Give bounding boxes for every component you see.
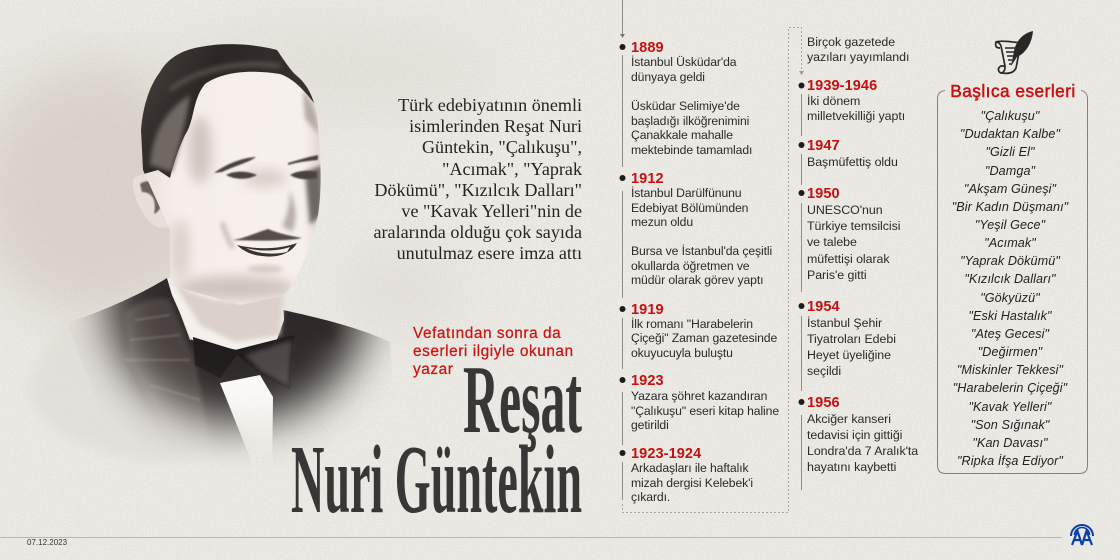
list of works: "Kavak Yelleri"	[968, 400, 1052, 414]
list of works: "Yeşil Gece"	[975, 218, 1045, 232]
icon: agency logo	[1070, 524, 1094, 546]
timeline column 2: yazıları yayımlandı	[807, 50, 909, 64]
timeline column 1: mektebinde tamamladı	[631, 142, 752, 156]
timeline column 1: mizah dergisi Kelebek'i	[631, 476, 753, 490]
timeline column 2: 1956	[807, 395, 840, 411]
list of works: "Kan Davası"	[972, 436, 1048, 450]
intro paragraph: isimlerinden Reşat Nuri	[409, 116, 582, 136]
list of works: "Bir Kadın Düşmanı"	[952, 200, 1068, 214]
date: 07.12.2023	[27, 538, 67, 547]
list of works: "Akşam Güneşi"	[964, 182, 1056, 196]
list of works: "Harabelerin Çiçeği"	[953, 381, 1067, 395]
timeline column 1: İlk romanı "Harabelerin	[631, 316, 753, 330]
intro paragraph: aralarında olduğu çok sayıda	[373, 222, 582, 242]
timeline column 1: başladığı ilköğrenimini	[631, 114, 749, 128]
timeline column 1: Üsküdar Selimiye'de	[631, 99, 740, 113]
list of works: "Ateş Gecesi"	[971, 327, 1049, 341]
timeline column 1: mezun oldu	[631, 215, 693, 229]
neck and shirt collar	[167, 278, 284, 350]
timeline column 2: ve talebe	[807, 235, 857, 249]
timeline column 1: Arkadaşları ile haftalık	[631, 461, 748, 475]
panel heading: Başlıca eserleri	[950, 81, 1076, 101]
list of works: "Değirmen"	[978, 345, 1042, 359]
timeline column 2: Londra'da 7 Aralık'ta	[807, 444, 918, 458]
timeline column 2: Başmüfettiş oldu	[807, 154, 898, 168]
portrait of Reşat Nuri Güntekin	[34, 44, 390, 458]
red subtitle: eserleri ilgiyle okunan	[413, 343, 574, 360]
main title	[291, 355, 582, 525]
panel: major works frame	[937, 90, 1088, 474]
timeline column 2: İki dönem	[807, 94, 860, 108]
intro paragraph: Türk edebiyatının önemli	[398, 95, 582, 115]
intro paragraph: ve "Kavak Yelleri"nin de	[401, 201, 582, 221]
timeline column 2: 1947	[807, 138, 840, 154]
list of works: "Acımak"	[984, 236, 1036, 250]
pale body silhouette	[30, 323, 255, 462]
timeline column 2: Heyet üyeliğine	[807, 348, 891, 362]
timeline column 1: Bursa ve İstanbul'da çeşitli	[631, 244, 772, 258]
timeline column 2: 1954	[807, 299, 840, 315]
hair	[140, 40, 325, 178]
timeline column 1: Yazara şöhret kazandıran	[631, 389, 767, 403]
timeline column 2: İstanbul Şehir	[807, 316, 882, 330]
timeline column 2: seçildi	[807, 364, 841, 378]
timeline column 1: müdür olarak görev yaptı	[631, 273, 763, 287]
timeline column 1: İstanbul Darülfünunu	[631, 186, 741, 200]
ear	[133, 175, 172, 228]
list of works: "Eski Hastalık"	[968, 309, 1052, 323]
list of works: "Dudaktan Kalbe"	[960, 127, 1060, 141]
list of works: "Kızılcık Dalları"	[964, 272, 1056, 286]
timeline column 1: İstanbul Üsküdar'da	[631, 55, 736, 69]
timeline column 1: "Çalıkuşu" eseri kitap haline	[631, 404, 779, 418]
red subtitle: Vefatından sonra da	[413, 325, 561, 342]
head and face	[140, 40, 325, 310]
timeline column 1: 1912	[631, 171, 664, 187]
list of works: "Çalıkuşu"	[981, 109, 1039, 123]
list of works: "Son Sığınak"	[971, 418, 1049, 432]
timeline column 2: UNESCO'nun	[807, 203, 883, 217]
list of works	[952, 109, 1068, 468]
intro paragraph: Dökümü", "Kızılcık Dalları"	[374, 180, 582, 200]
timeline column 2: 1939-1946	[807, 78, 877, 94]
red subtitle: yazar	[413, 361, 453, 378]
timeline lines and dotted connector	[620, 0, 804, 513]
timeline column 2: tedavisi için gittiği	[807, 428, 902, 442]
list of works: "Damga"	[985, 164, 1035, 178]
intro paragraph	[373, 95, 582, 263]
timeline column 1: 1923-1924	[631, 446, 701, 462]
list of works: "Gizli El"	[985, 145, 1035, 159]
timeline column 2: Paris'e gitti	[807, 268, 867, 282]
timeline column 1: okuyucuyla buluştu	[631, 346, 733, 360]
timeline column 1: 1923	[631, 373, 664, 389]
timeline column 1: getirildi	[631, 418, 669, 432]
timeline column 2	[807, 35, 918, 474]
list of works: "Ripka İfşa Ediyor"	[957, 454, 1063, 468]
timeline column 1: Çiçeği" Zaman gazetesinde	[631, 331, 777, 345]
facial features	[214, 157, 256, 173]
timeline column 2: Tiyatroları Edebi	[807, 332, 896, 346]
timeline column 2: Akciğer kanseri	[807, 412, 891, 426]
footer rule	[0, 537, 1062, 538]
jacket	[76, 278, 390, 456]
timeline column 1: dünyaya geldi	[631, 70, 705, 84]
red subtitle	[412, 325, 574, 378]
timeline column 2: hayatını kaybetti	[807, 460, 896, 474]
bow tie	[193, 335, 294, 390]
intro paragraph: unutulmaz esere imza attı	[397, 243, 582, 263]
list of works: "Miskinler Tekkesi"	[957, 363, 1063, 377]
timeline column 1: 1889	[631, 40, 664, 56]
timeline column 2: müfettişi olarak	[807, 252, 890, 266]
timeline column 2: milletvekilliği yaptı	[807, 108, 905, 122]
intro paragraph: Güntekin, "Çalıkuşu",	[422, 137, 582, 157]
intro paragraph: "Acımak", "Yaprak	[442, 159, 582, 179]
timeline column 1: çıkardı.	[631, 490, 670, 504]
icon: scroll and quill	[994, 31, 1033, 74]
timeline column 1: 1919	[631, 302, 664, 318]
list of works: "Yaprak Dökümü"	[960, 254, 1060, 268]
timeline column 2: 1950	[807, 186, 840, 202]
timeline column 2: Türkiye temsilcisi	[807, 219, 900, 233]
timeline column 1: okullarda öğretmen ve	[631, 258, 750, 272]
timeline column 1	[631, 40, 779, 504]
timeline column 2: Birçok gazetede	[807, 35, 895, 49]
timeline column 1: Çanakkale mahalle	[631, 128, 733, 142]
timeline column 1: Edebiyat Bölümünden	[631, 200, 748, 214]
list of works: "Gökyüzü"	[980, 291, 1040, 305]
